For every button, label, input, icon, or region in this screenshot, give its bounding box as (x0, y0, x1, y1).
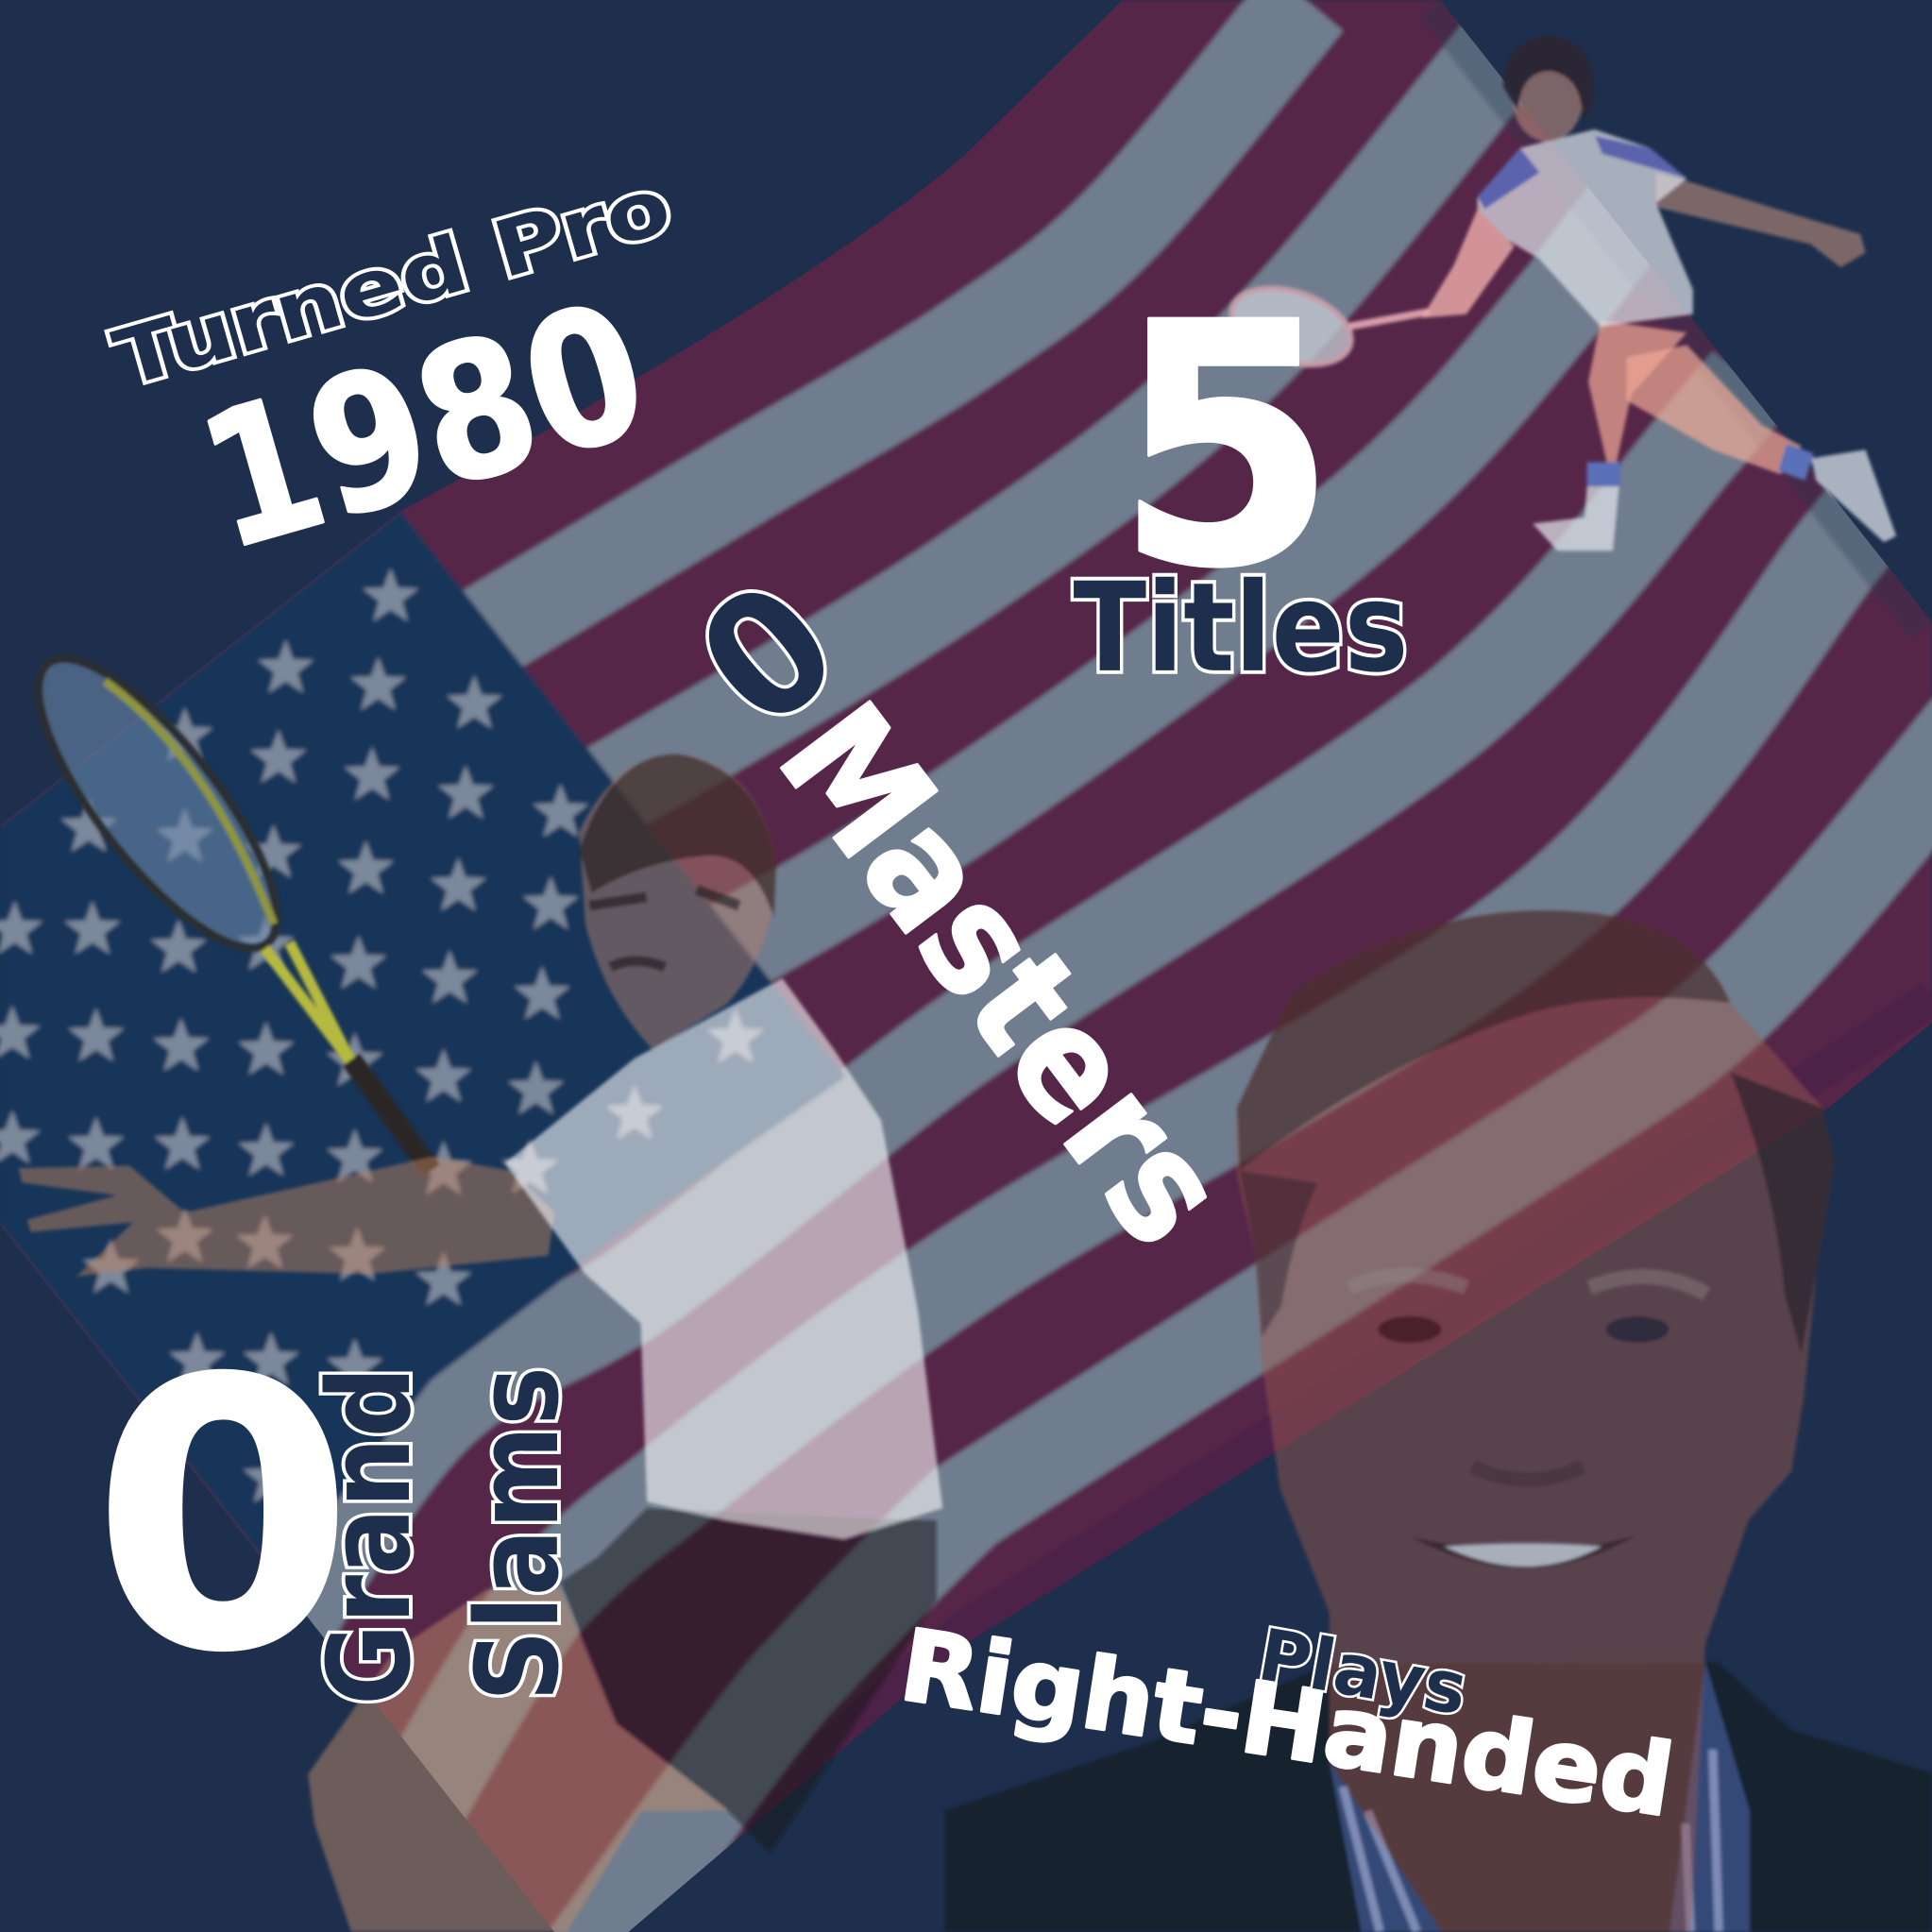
portrait: smiling man at bottom right (945, 910, 1932, 1932)
flag canton (0, 512, 846, 1577)
stat: titles label: Titles (1074, 556, 1408, 700)
striped shirt (1330, 1662, 1750, 1932)
stat: grand label: Grand (305, 1366, 436, 1705)
eyebrows (1349, 1276, 1706, 1294)
eyes (1378, 1316, 1442, 1343)
player: lunging at top right (1222, 36, 1896, 551)
shorts (561, 1508, 937, 1853)
teeth (1444, 1543, 1602, 1567)
arm (19, 1157, 554, 1277)
racket (2, 627, 432, 1171)
stat: plays label: Plays (1253, 1613, 1473, 1731)
head (579, 754, 776, 1050)
side hair right (1730, 1072, 1835, 1355)
left arm (1422, 210, 1515, 318)
stat: right-handed: Right-Handed (893, 1607, 1681, 1839)
hair (1503, 36, 1595, 123)
stat: masters label: Masters (745, 673, 1261, 1277)
jacket (945, 1662, 1932, 1932)
smile (1410, 1534, 1638, 1568)
racket (1222, 275, 1430, 379)
stat: 0 masters number: 0 (664, 545, 873, 766)
stat: slams label: Slams (453, 1366, 585, 1702)
shirt (505, 978, 942, 1539)
shirt (1478, 129, 1693, 327)
hair (579, 754, 776, 918)
socks (1587, 444, 1814, 486)
side hair left (1240, 1171, 1318, 1337)
stat: turned pro label: Turned Pro (105, 161, 681, 405)
right arm (1656, 173, 1866, 267)
facial features (589, 890, 739, 967)
left leg (1588, 320, 1686, 462)
player: forehand at left (2, 627, 942, 1932)
shoes (1533, 449, 1896, 551)
stat: 0 grand slams number: 0 (93, 1303, 353, 1733)
hair (1237, 910, 1730, 1171)
stat: 1980: 1980 (179, 263, 668, 592)
right leg (1626, 345, 1802, 474)
face and neck (1237, 910, 1835, 1932)
stat: 5: 5 (1115, 253, 1337, 641)
nose shadow (1472, 1466, 1584, 1480)
legs (308, 1589, 727, 1932)
head (1513, 60, 1582, 142)
shoulders (1478, 136, 1686, 210)
